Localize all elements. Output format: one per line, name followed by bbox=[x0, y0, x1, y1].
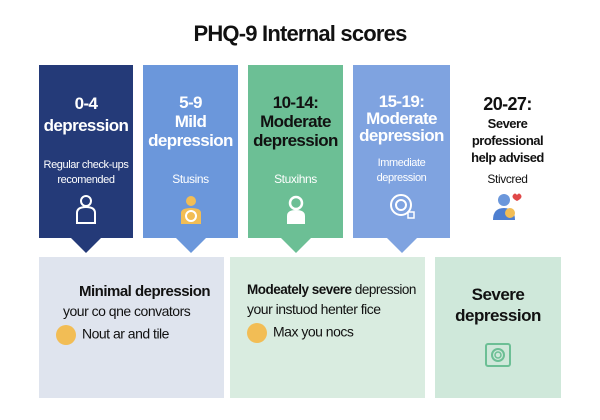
panel: 5-9: 5-9 bbox=[179, 93, 202, 112]
bottom panel: minimal bbox=[39, 257, 224, 398]
panel: 0-4: recomended bbox=[57, 174, 115, 186]
icon: yellow person bbox=[181, 196, 201, 224]
panel: 20-27: Stivcred bbox=[487, 172, 528, 186]
panel: 15-19: 15-19: bbox=[379, 92, 424, 111]
bottom panel: moderately severe bbox=[230, 257, 425, 398]
icon: person bbox=[76, 195, 96, 224]
bottom panel: severe: Severe bbox=[472, 285, 524, 304]
panel: 15-19: Immediate bbox=[378, 157, 425, 169]
bottom panel: moderately severe: Modeately severe depression bbox=[247, 282, 416, 297]
bottom panel: moderately severe: Max you nocs bbox=[273, 324, 353, 340]
panel: 15-19: depression bbox=[359, 126, 444, 145]
panel: 10-14: 10-14: bbox=[273, 93, 318, 112]
panel: 10-14 bbox=[248, 65, 343, 238]
panel: 5-9: depression bbox=[148, 131, 233, 150]
panel: 10-14: depression bbox=[253, 131, 338, 150]
icon: parent with heart bbox=[493, 194, 522, 220]
panel: 10-14: Moderate bbox=[260, 112, 331, 131]
panel: 0-4: Regular check-ups bbox=[44, 159, 128, 171]
panel: 0-4 bbox=[39, 65, 133, 238]
panel: 20-27: Severe bbox=[488, 116, 527, 131]
panel: 5-9 bbox=[143, 65, 238, 238]
panel: 0-4: 0-4 bbox=[75, 94, 97, 113]
panel: 20-27: professional bbox=[472, 133, 543, 148]
bottom panel: minimal: Minimal depression bbox=[79, 283, 210, 300]
panel: 15-19: Moderate bbox=[366, 109, 437, 128]
panel: 15-19 bbox=[353, 65, 450, 238]
bottom panel: minimal: your co qne convators bbox=[63, 303, 190, 319]
icon: woman bbox=[287, 196, 305, 224]
panel: 0-4: depression bbox=[44, 116, 128, 135]
panel: 5-9: Mild bbox=[175, 112, 206, 131]
bottom panel: severe bbox=[435, 257, 561, 398]
panel: 5-9: Stusins bbox=[172, 172, 209, 186]
icon: camera bbox=[485, 343, 511, 367]
panel: 15-19: depression bbox=[377, 172, 426, 184]
bottom panel: moderately severe: your instuod henter fice bbox=[247, 301, 381, 317]
title: PHQ-9 Internal scores bbox=[193, 21, 407, 46]
panel: 20-27: help advised bbox=[471, 150, 544, 165]
panel: 20-27 bbox=[471, 94, 544, 220]
icon: badge bbox=[390, 194, 415, 219]
panel: 20-27: 20-27: bbox=[483, 94, 532, 114]
panel: 10-14: Stuxihns bbox=[274, 172, 317, 186]
bottom panel: severe: depression bbox=[455, 306, 541, 325]
bottom panel: minimal: Nout ar and tile bbox=[82, 326, 169, 342]
